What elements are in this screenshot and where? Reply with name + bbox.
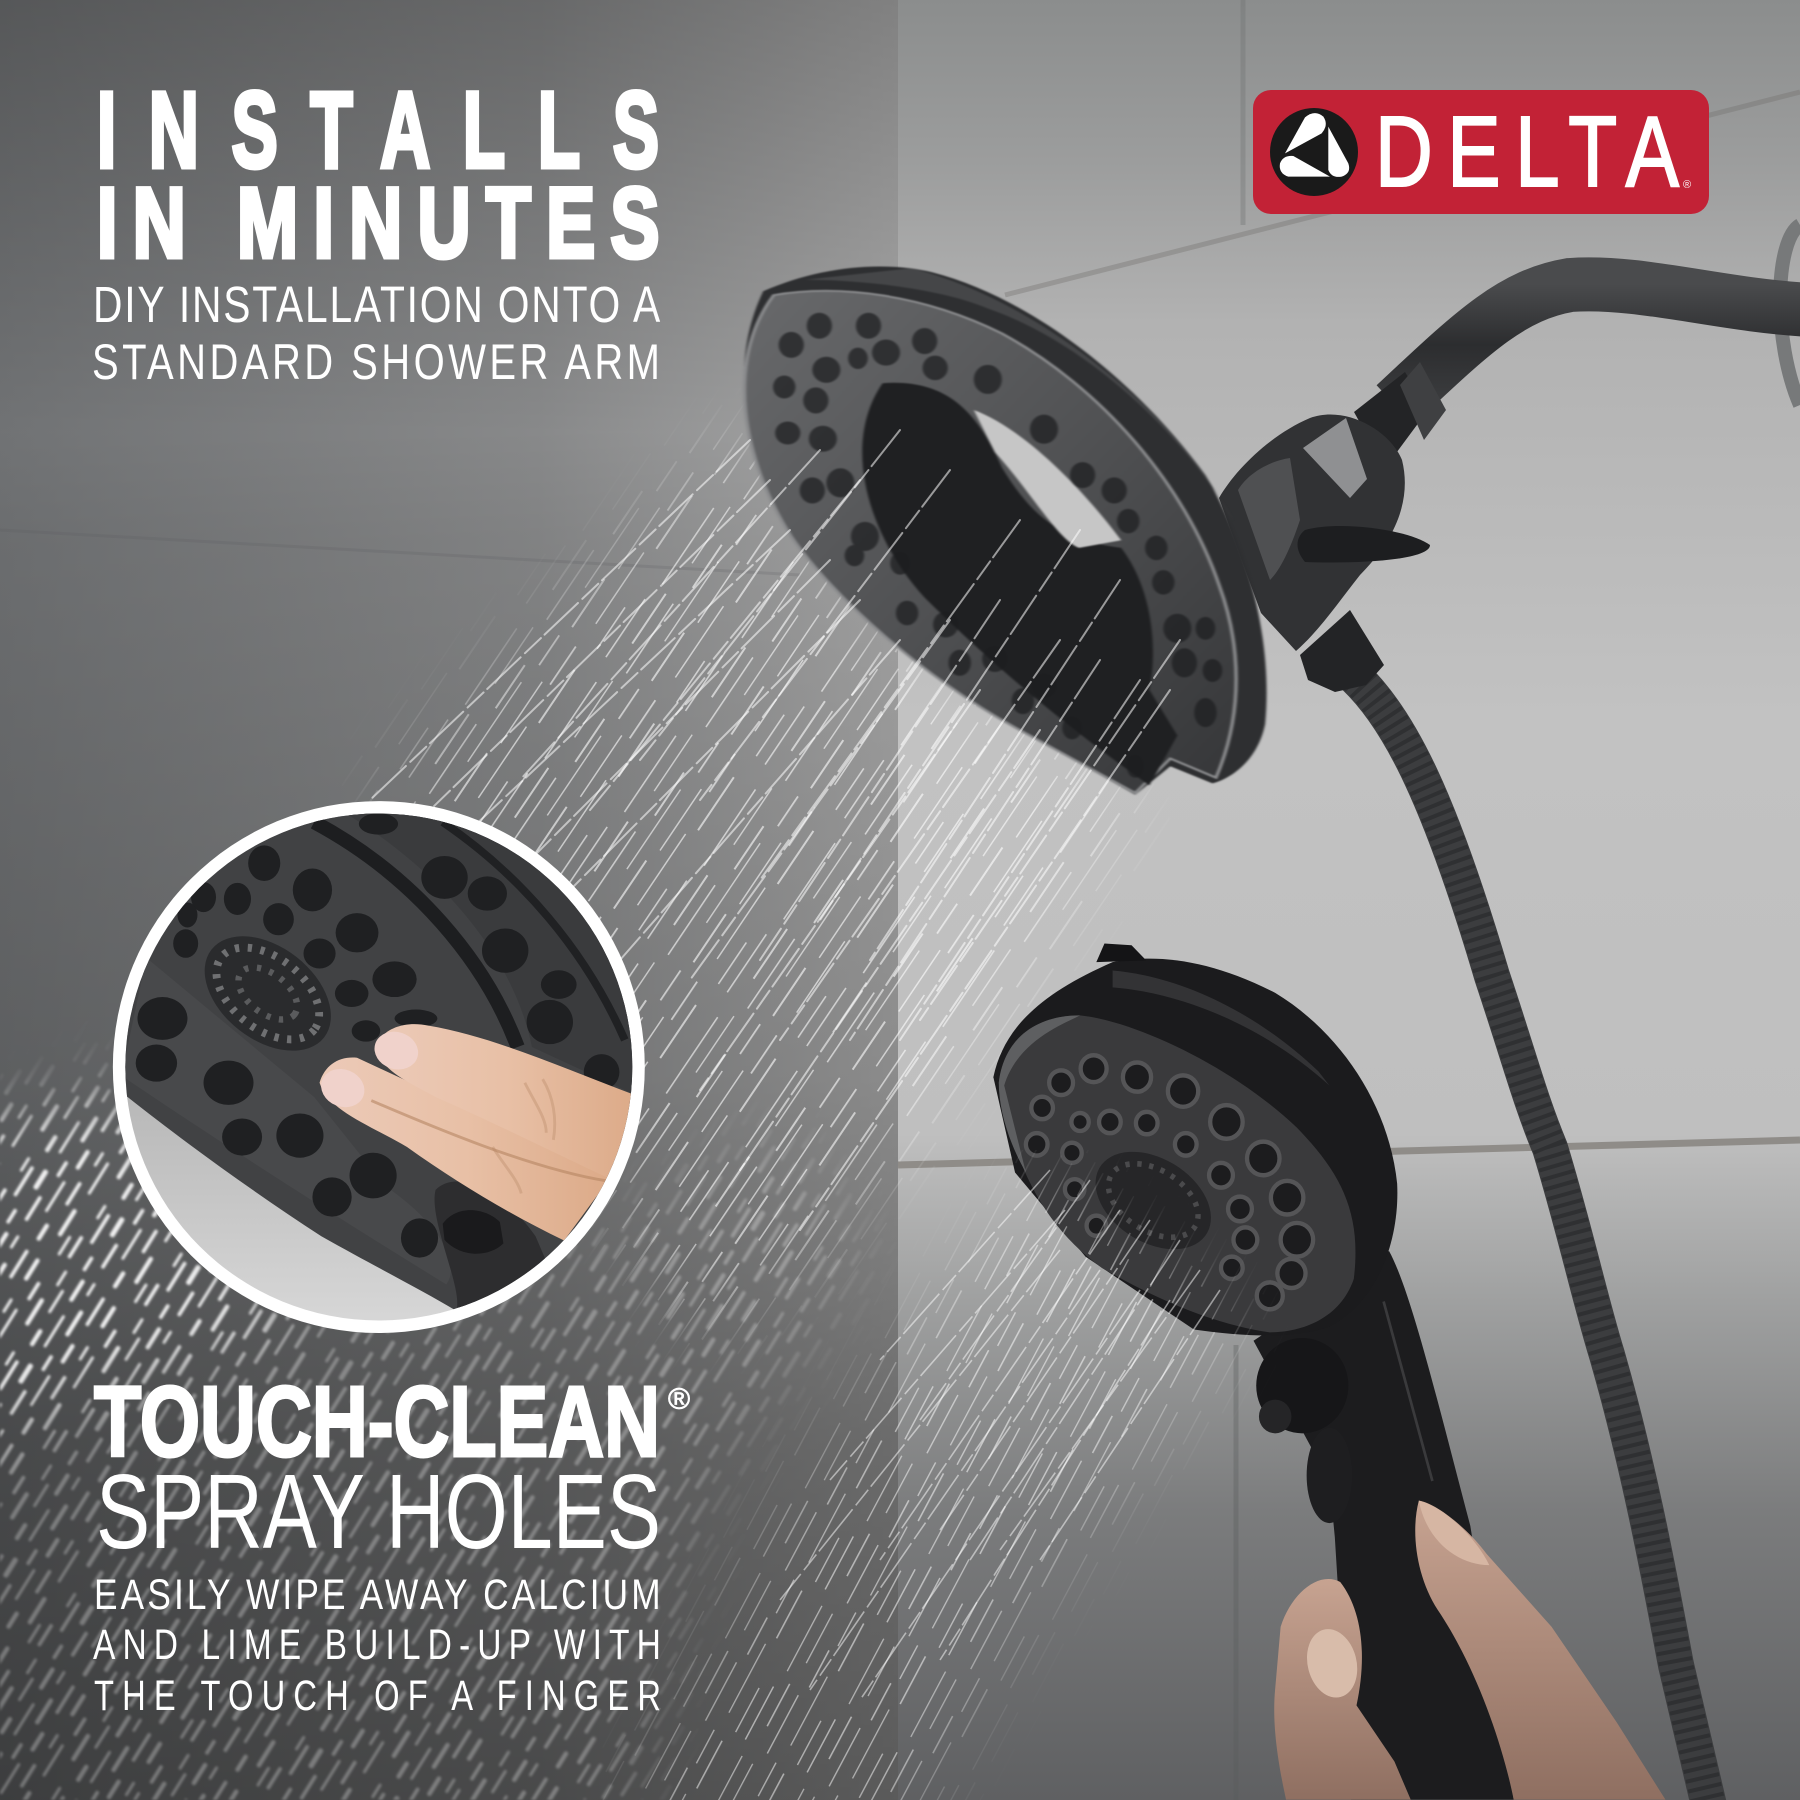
thumb [1415,1501,1665,1800]
text: DIY installation: STANDARD SHOWER ARM [92,334,660,390]
text: easily wipe away: AND LIME BUILD-UP WITH [93,1621,661,1669]
heading: Touch-Clean spray holes [94,1366,690,1571]
nozzles [136,813,619,1258]
icon: wall flange [1780,225,1800,405]
dark inner cavity [862,383,1177,785]
outer ring band [348,814,632,1092]
spray nozzles [773,313,1222,778]
text: easily wipe away [93,1571,661,1720]
rosette [204,936,331,1050]
logo: Delta: ® [1683,179,1691,191]
heading: Installs in minutes: INSTALLS [97,71,659,191]
text: DIY installation [92,276,660,390]
knob [435,1182,546,1308]
icon: diverter body [1219,414,1430,692]
nozzles [1026,1055,1313,1309]
icon: overhead ring shower head [744,266,1267,795]
fine spray from hand shower [600,1150,1300,1800]
logo: Delta: DELTA [1375,97,1680,208]
icon: hose [1355,677,1710,1800]
head shell [993,959,1397,1336]
text: easily wipe away: THE TOUCH OF A FINGER [94,1672,661,1720]
coarse spray in lower left [0,1052,860,1800]
fingers [320,1058,611,1241]
text: DIY installation: DIY INSTALLATION ONTO A [93,276,660,333]
inset circle: touch-clean close-up [112,801,645,1333]
spray face ring [744,291,1236,793]
text: easily wipe away: EASILY WIPE AWAY CALCIUM [94,1571,661,1619]
fingers [1274,1579,1411,1800]
knob [1256,1338,1348,1433]
spray face [125,814,632,1310]
icon: hand shower [993,944,1665,1800]
heading: Touch-Clean spray holes: SPRAY HOLES [96,1453,661,1571]
handle [1254,1251,1514,1800]
logo: Delta [1253,90,1709,214]
head face [999,1015,1355,1332]
heading: Installs in minutes: IN MINUTES [97,168,659,279]
heading: Installs in minutes [97,71,659,279]
water strands from hand shower [780,1170,1220,1700]
hole through the head [974,410,1121,548]
icon: shower arm [1354,284,1800,468]
water strands from overhead head [370,430,1180,1230]
heading: Touch-Clean spray holes: TOUCH-CLEAN [94,1366,660,1478]
fine spray from overhead shower [361,421,1141,1347]
heading: Touch-Clean spray holes: ® [668,1383,690,1416]
rosette [1079,1132,1228,1269]
icon: Delta triangle mark [1270,108,1358,196]
